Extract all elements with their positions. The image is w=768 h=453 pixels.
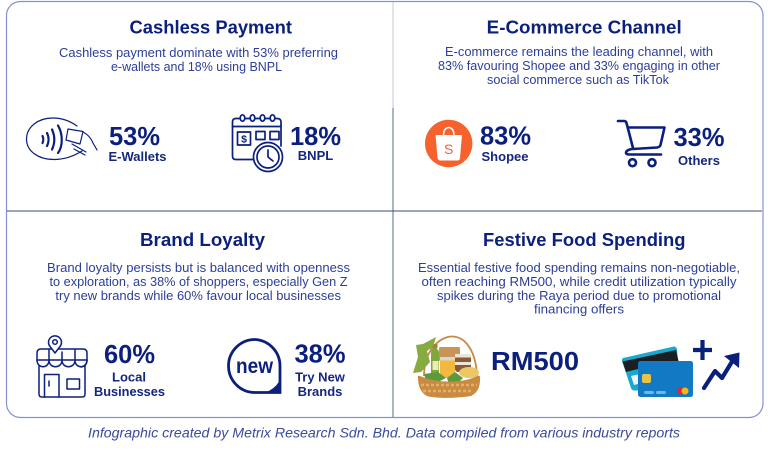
icon: shopee bag: S [444, 141, 453, 157]
text block: brand loyalty description: Brand loyalty persists but is balanced with openness [47, 261, 350, 275]
label: dollar sign: $ [241, 134, 247, 146]
text block: festive spending description: often reaching RM500, while credit utilization typically [422, 275, 737, 289]
text block: cashless payment description: Cashless payment dominate with 53% preferring [59, 46, 338, 60]
stat: try new brands 38%: Brands [298, 384, 342, 399]
stat: local businesses 60%: Businesses [94, 384, 165, 399]
stat: try new brands 38% [294, 340, 346, 399]
stat: others 33%: Others [678, 153, 720, 168]
icon: shopping cart [618, 121, 664, 166]
text block: festive spending description: spikes during the Raya period due to promotional [437, 289, 721, 303]
icon: new speech bubble: new [236, 355, 274, 378]
icon: contactless hand payment [26, 118, 97, 160]
text block: festive spending description: Essential festive food spending remains non-negotiable, [418, 261, 740, 275]
stat: shopee 83%: 83% [480, 122, 531, 150]
icon: shopee bag [425, 120, 472, 167]
icon: credit cards with rising arrow [622, 340, 740, 397]
text block: festive spending description [418, 261, 740, 316]
stat: RM500: RM500 [491, 348, 579, 376]
stat: BNPL 18%: 18% [290, 123, 341, 151]
heading: e-commerce channel: E-Commerce Channel [487, 18, 682, 38]
panel: cashless payment [26, 18, 341, 172]
icon: new speech bubble [228, 340, 280, 392]
icon: BNPL calendar with clock [232, 115, 282, 172]
text block: e-commerce description: social commerce such as TikTok [487, 73, 670, 87]
icon: festive food basket [413, 336, 480, 398]
panel: brand loyalty [37, 230, 350, 399]
stat: try new brands 38%: 38% [294, 340, 346, 368]
heading: cashless payment: Cashless Payment [130, 18, 292, 38]
stat: others 33%: 33% [673, 124, 725, 152]
stat: others 33% [673, 124, 725, 168]
text block: e-commerce description [438, 45, 720, 87]
stat: shopee 83%: Shopee [482, 149, 528, 164]
footer credit: Infographic created by Metrix Research Sdn. Bhd. Data compiled from various industry reports [88, 426, 680, 440]
stat: e-wallets 53%: 53% [109, 123, 160, 151]
stat: local businesses 60% [94, 341, 165, 399]
stat: local businesses 60%: 60% [104, 341, 155, 369]
stat: e-wallets 53% [108, 123, 167, 164]
text block: festive spending description: financing offers [534, 302, 624, 316]
stat: e-wallets 53%: E-Wallets [108, 149, 167, 164]
stat: shopee 83% [480, 122, 531, 164]
text block: e-commerce description: E-commerce remains the leading channel, with [445, 45, 713, 59]
text block: e-commerce description: 83% favouring Shopee and 33% engaging in other [438, 59, 720, 73]
heading: brand loyalty: Brand Loyalty [140, 230, 265, 250]
text block: brand loyalty description: to exploration, as 38% of shoppers, especially Gen Z [50, 275, 348, 289]
stat: BNPL 18%: BNPL [298, 148, 333, 163]
text block: brand loyalty description: try new brands while 60% favour local businesses [55, 289, 341, 303]
stat: local businesses 60%: Local [112, 370, 146, 384]
icon: local store with pin [37, 336, 87, 397]
text block: cashless payment description: e-wallets and 18% using BNPL [111, 60, 282, 74]
heading: festive food spending: Festive Food Spending [483, 230, 686, 250]
panel: festive food spending [413, 230, 740, 398]
text block: brand loyalty description [47, 261, 350, 303]
stat: try new brands 38%: Try New [295, 370, 346, 384]
text block: cashless payment description [59, 46, 338, 74]
panel: e-commerce channel [425, 18, 725, 168]
